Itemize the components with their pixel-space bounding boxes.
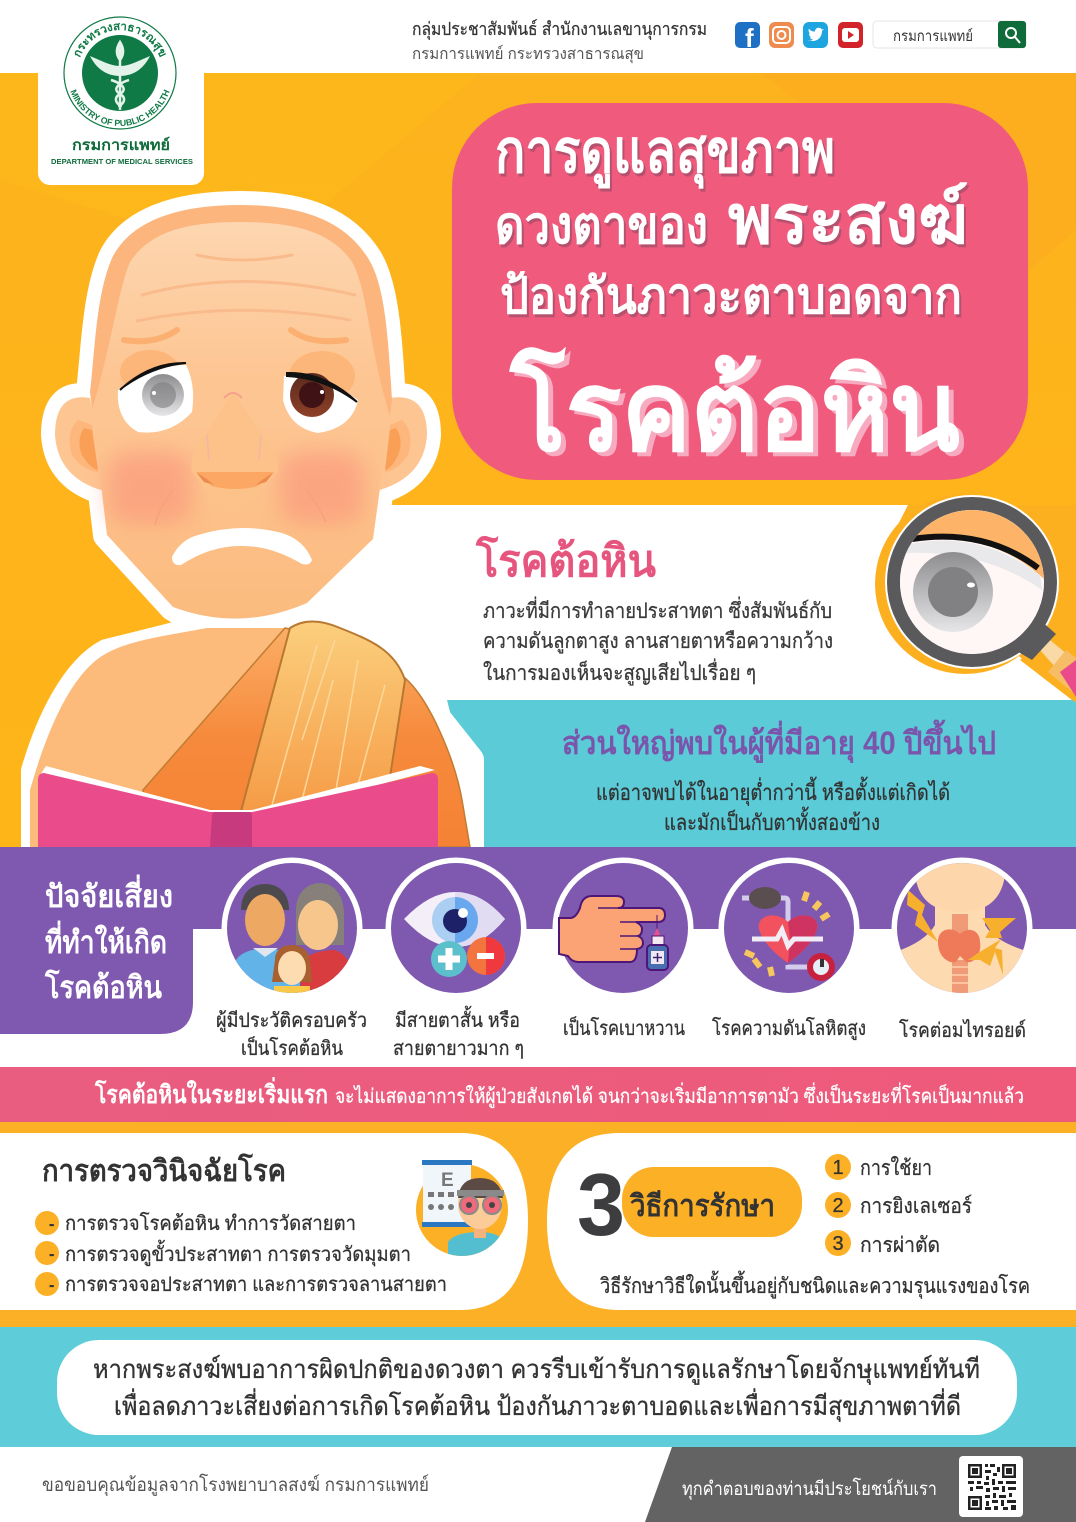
title text: โรคต้อหิน	[509, 347, 960, 474]
risk heading panel: ที่ทำให้เกิด	[45, 920, 167, 960]
treatment list: การยิงเลเซอร์	[860, 1194, 972, 1218]
white risk area	[0, 929, 1076, 1067]
treatment list	[825, 1154, 972, 1257]
icon: magnifying glass with eye	[875, 494, 1076, 702]
robe fold lines	[272, 640, 385, 805]
icon: heart and blood pressure gauge	[742, 887, 835, 981]
diagnosis list: -	[49, 1216, 54, 1233]
cheeks	[108, 452, 364, 524]
diagnosis list: การตรวจโรคต้อหิน ทำการวัดสายตา	[65, 1212, 356, 1235]
advice callout: เพื่อลดภาวะเสี่ยงต่อการเกิดโรคต้อหิน ป้องกันภาวะตาบอดและเพื่อการมีสุขภาพตาที่ดี	[114, 1388, 961, 1422]
monk white outline	[35, 205, 470, 860]
age statement	[562, 719, 996, 835]
definition paragraph: ภาวะที่มีการทำลายประสาทตา ซึ่งสัมพันธ์กับ	[483, 596, 832, 623]
risk item: diabetes: เป็นโรคเบาหวาน	[563, 1015, 685, 1040]
icon: throat with thyroid	[901, 863, 1023, 993]
footer credit: ขอขอบคุณข้อมูลจากโรงพยาบาลสงฆ์ กรมการแพทย์	[42, 1473, 429, 1497]
diagnosis list: การตรวจดูขั้วประสาทตา การตรวจวัดมุมตา	[65, 1240, 411, 1267]
advice callout	[57, 1340, 1017, 1435]
warning band: โรคต้อหินในระยะเริ่มแรก	[94, 1077, 328, 1109]
risk item: thyroid	[892, 855, 1032, 1042]
risk item: short or long sighted: สายตายาวมาก ๆ	[393, 1038, 524, 1060]
risk item: short or long sighted: มีสายตาสั้น หรือ	[395, 1006, 520, 1032]
treatment list: 1	[832, 1157, 844, 1179]
orange hero background	[0, 73, 1076, 863]
definition paragraph	[483, 596, 833, 686]
age statement: แต่อาจพบได้ในอายุต่ำกว่านี้ หรือตั้งแต่เกิดได้	[596, 777, 950, 806]
teal advice band	[0, 1327, 1076, 1447]
logo emblem	[63, 16, 177, 130]
footer grey tag	[645, 1447, 1076, 1522]
title text: ป้องกันภาวะตาบอดจาก	[500, 268, 962, 324]
definition heading: โรคต้อหิน	[475, 534, 656, 586]
diagnosis heading: การตรวจวินิจฉัยโรค	[42, 1152, 286, 1188]
title panel	[452, 103, 1028, 480]
age statement: ส่วนใหญ่พบในผู้ที่มีอายุ 40 ปีขึ้นไป	[562, 719, 996, 764]
risk item: family history: เป็นโรคต้อหิน	[241, 1035, 343, 1060]
department name: กรมการแพทย์	[72, 136, 170, 154]
right eye	[283, 351, 358, 433]
treatment list: การใช้ยา	[860, 1156, 932, 1180]
icon: family	[235, 883, 352, 996]
ears	[55, 397, 427, 492]
treatment number: 3	[577, 1155, 625, 1254]
title text: พระสงฆ์	[728, 182, 968, 258]
diagnosis list	[35, 1211, 447, 1296]
white definition panel background	[300, 505, 1076, 847]
warning band	[0, 1067, 1076, 1122]
icon: finger prick	[559, 896, 668, 970]
icon: facebook	[735, 22, 760, 53]
robe back	[143, 628, 470, 847]
nose	[155, 392, 326, 525]
department name: DEPARTMENT OF MEDICAL SERVICES	[51, 157, 193, 166]
illustration: monk	[30, 205, 470, 860]
icon: eye with plus and minus	[404, 892, 505, 977]
header organisation text: กรมการแพทย์ กระทรวงสาธารณสุข	[412, 44, 644, 64]
icon: youtube	[838, 22, 863, 48]
search box	[873, 21, 1026, 48]
left eye: cloudy	[118, 350, 193, 433]
icon: eye test: E	[441, 1170, 454, 1191]
risk item: thyroid: โรคต่อมไทรอยด์	[899, 1019, 1026, 1042]
logo emblem: MINISTRY OF PUBLIC HEALTH	[70, 89, 170, 126]
panel: three treatments	[547, 1133, 1076, 1310]
treatment list: 2	[832, 1195, 844, 1217]
treatment list: 3	[832, 1233, 844, 1255]
forehead highlight	[89, 222, 391, 420]
icon: instagram	[769, 22, 794, 48]
risk heading panel: โรคต้อหิน	[44, 969, 162, 1005]
risk item: short or long sighted	[386, 858, 526, 1060]
torso	[30, 628, 300, 847]
QR code	[959, 1456, 1023, 1517]
orange corner behind magnifier	[880, 505, 1076, 702]
title text: ดวงตาของ	[495, 197, 708, 255]
icon: eye test	[416, 1160, 508, 1256]
risk item: family history: ผู้มีประวัติครอบครัว	[216, 1010, 367, 1033]
risk item: diabetes	[552, 858, 694, 1040]
title text: การดูแลสุขภาพ	[495, 118, 835, 189]
panel: diagnosis	[0, 1133, 528, 1310]
risk item: hypertension	[712, 858, 866, 1041]
icon: twitter	[803, 22, 828, 48]
department name	[51, 136, 193, 166]
definition paragraph: ในการมองเห็นจะสูญเสียไปเรื่อย ๆ	[483, 658, 756, 686]
treatment pill	[622, 1167, 802, 1237]
title text	[495, 118, 968, 474]
book	[38, 766, 438, 847]
risk item: hypertension: โรคความดันโลหิตสูง	[712, 1017, 866, 1041]
advice callout: หากพระสงฆ์พบอาการผิดปกติของดวงตา ควรรีบเข้ารับการดูแลรักษาโดยจักษุแพทย์ทันที	[93, 1354, 980, 1385]
footer grey tag: ทุกคำตอบของท่านมีประโยชน์กับเรา	[682, 1477, 937, 1501]
logo card	[38, 16, 204, 185]
diagnosis list: -	[49, 1246, 54, 1263]
definition paragraph: ความดันลูกตาสูง ลานสายตาหรือความกว้าง	[483, 630, 833, 654]
treatment list: การผ่าตัด	[860, 1234, 940, 1257]
face	[90, 205, 392, 619]
age statement: และมักเป็นกับตาทั้งสองข้าง	[664, 807, 880, 835]
treatment heading: วิธีการรักษา	[629, 1190, 775, 1223]
logo emblem: กระทรวงสาธารณสุข	[74, 22, 166, 58]
robe front drape	[240, 622, 405, 815]
risk heading panel: ปัจจัยเสี่ยง	[45, 874, 173, 914]
teal age panel background	[447, 700, 1076, 847]
header organisation text	[412, 19, 707, 64]
diagnosis list: การตรวจจอประสาทตา และการตรวจลานสายตา	[65, 1274, 447, 1296]
risk heading panel	[0, 874, 193, 1034]
search box: กรมการแพทย์	[893, 28, 973, 45]
header bar	[0, 0, 1076, 73]
purple risk band	[0, 847, 1076, 929]
diagnosis list: -	[49, 1277, 54, 1294]
header organisation text: กลุ่มประชาสัมพันธ์ สำนักงานเลขานุการกรม	[412, 19, 707, 40]
orange lower band	[0, 1122, 1076, 1328]
risk item: family history	[216, 858, 367, 1060]
mouth	[172, 528, 312, 565]
icon: facebook: f	[745, 23, 754, 53]
wrinkles	[124, 255, 355, 341]
